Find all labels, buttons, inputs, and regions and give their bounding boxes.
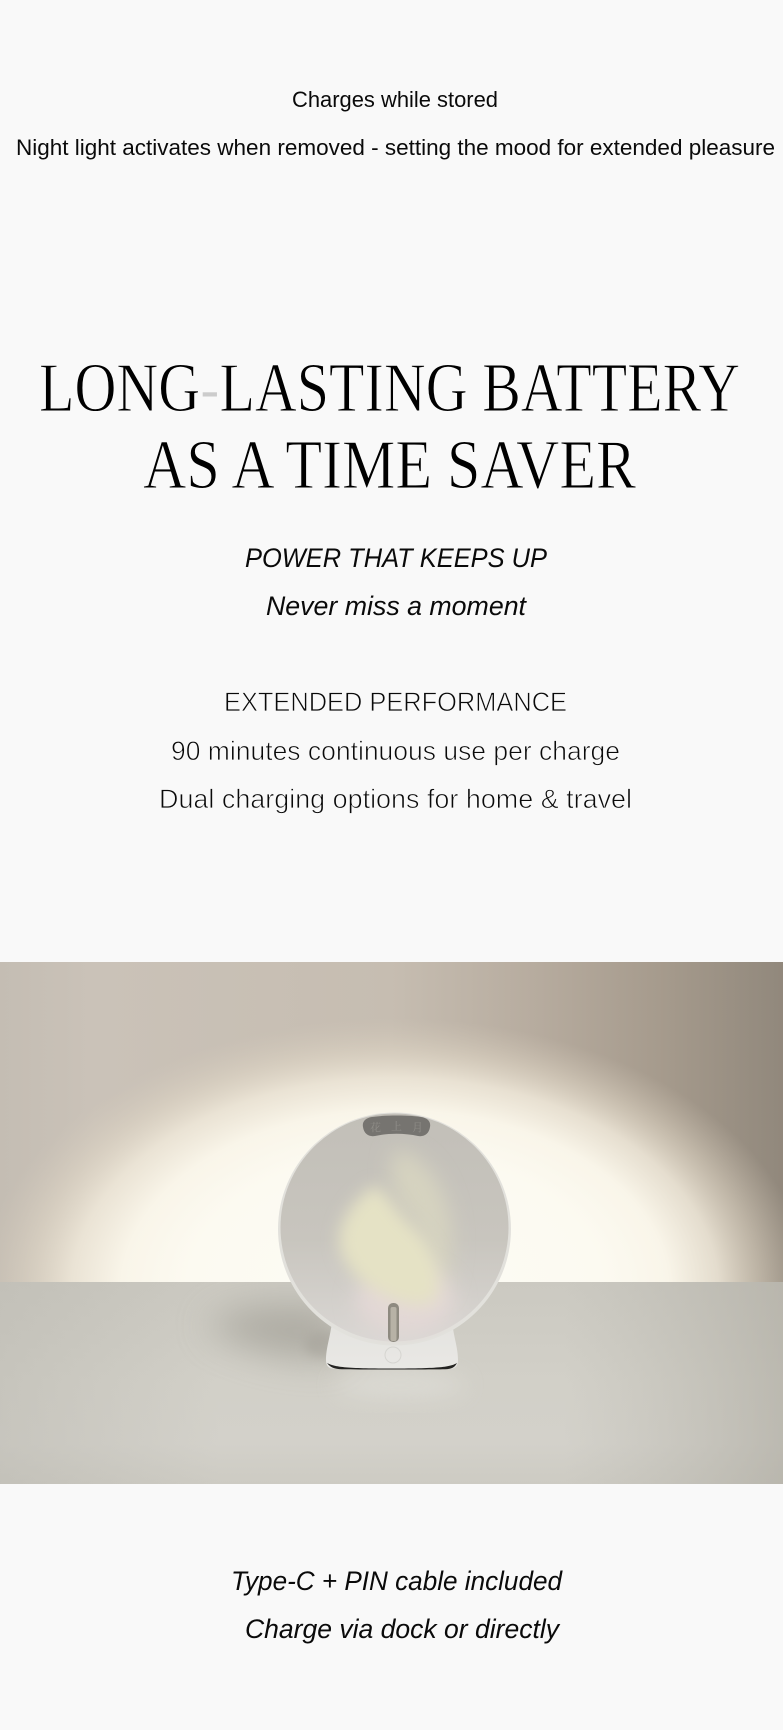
photo table surface (0, 1282, 783, 1484)
subheading line one: POWER THAT KEEPS UP (245, 543, 547, 573)
text block: extended performance (159, 687, 632, 814)
lamp display pill: 上 (391, 1118, 402, 1134)
heading (39, 350, 740, 504)
performance line: dual charging: Dual charging options for home & travel (159, 784, 632, 814)
cable line two: Charge via dock or directly (245, 1614, 560, 1644)
performance heading: EXTENDED PERFORMANCE (224, 687, 567, 717)
performance line: use per charge: 90 minutes continuous use per charge (171, 736, 620, 766)
lamp display pill: 花 (370, 1119, 381, 1135)
subheading: power that keeps up (245, 543, 547, 621)
lamp display pill: 月 (412, 1119, 423, 1135)
text block: cable notes (231, 1566, 563, 1644)
text block: charging notes (16, 87, 775, 160)
line: charges while stored: Charges while stored (292, 87, 498, 112)
lamp display pill (363, 1116, 430, 1136)
lamp disc (278, 1112, 511, 1346)
icon: lamp (278, 1112, 511, 1370)
line: night light: Night light activates when removed - setting the mood for extended pleasure (16, 135, 775, 160)
photo wall with glow (0, 962, 783, 1282)
lamp base (326, 1322, 458, 1370)
subheading line two: Never miss a moment (266, 591, 527, 621)
photo: lamp on table (0, 962, 783, 1484)
lamp charging pin (388, 1303, 399, 1342)
heading line two: AS A TIME SAVER (143, 427, 636, 504)
cable line one: Type-C + PIN cable included (231, 1566, 563, 1596)
